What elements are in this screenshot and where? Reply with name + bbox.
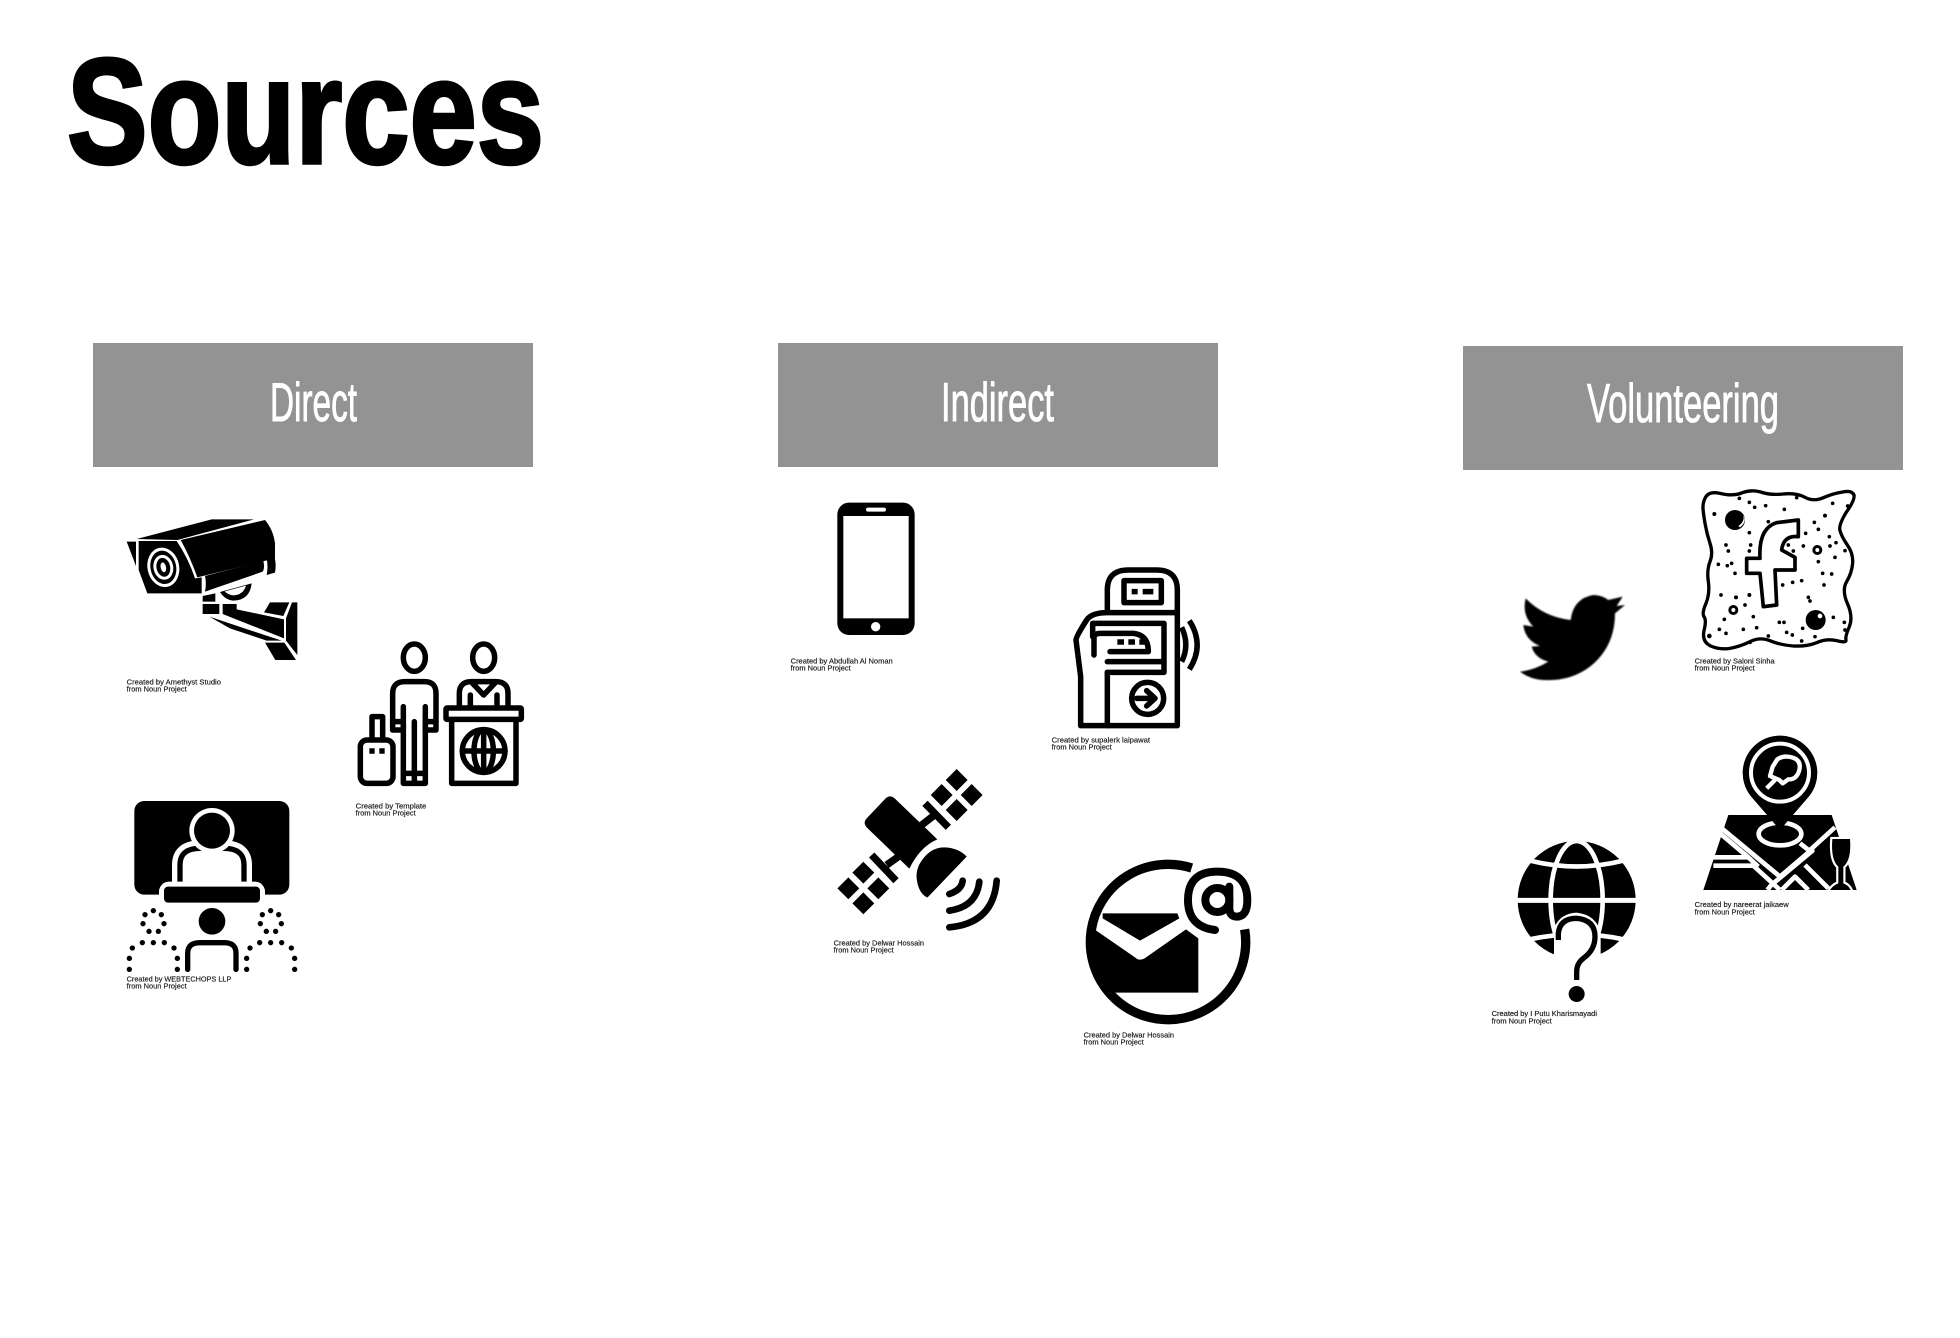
credit: Template: Created by Template xyxy=(356,803,426,810)
credit: supalerk laipawat: Created by supalerk laipawat xyxy=(1052,737,1150,744)
icon: traveller at passport desk xyxy=(360,644,521,783)
credit: Delwar Hossain (satellite): from Noun Project xyxy=(834,948,894,955)
credit: Template: from Noun Project xyxy=(356,811,416,818)
credit: Abdullah Al Noman xyxy=(791,658,893,673)
icon: satellite xyxy=(838,770,997,927)
icon: security camera xyxy=(127,519,297,660)
credit: Template xyxy=(356,803,426,818)
credit: Abdullah Al Noman: from Noun Project xyxy=(791,666,851,673)
credit: supalerk laipawat: from Noun Project xyxy=(1052,745,1112,752)
panel: volunteering xyxy=(1463,346,1903,1026)
credit: I Putu Kharismayadi: Created by I Putu Kharismayadi xyxy=(1492,1011,1597,1018)
heading: volunteering xyxy=(1463,346,1903,470)
credit: Amethyst Studio: Created by Amethyst Studio xyxy=(127,679,221,686)
credit: supalerk laipawat xyxy=(1052,737,1150,752)
credit: WEBTECHOPS LLP: from Noun Project xyxy=(127,984,187,991)
credit: Delwar Hossain (email) xyxy=(1084,1032,1174,1047)
panel: indirect xyxy=(778,343,1247,1047)
heading: indirect xyxy=(778,343,1218,467)
credit: Delwar Hossain (satellite): Created by Delwar Hossain xyxy=(834,940,924,947)
icon: presenter and audience xyxy=(127,801,297,972)
credit: Saloni Sinha: from Noun Project xyxy=(1695,666,1755,673)
heading: direct xyxy=(93,343,533,467)
credit: WEBTECHOPS LLP: Created by WEBTECHOPS LLP xyxy=(127,976,232,983)
icon: twitter bird xyxy=(1520,595,1625,680)
icon: globe with question mark xyxy=(1513,841,1640,1002)
credit: Abdullah Al Noman: Created by Abdullah Al Noman xyxy=(791,658,893,665)
icon: map pin with wine xyxy=(1703,736,1857,890)
credit: I Putu Kharismayadi xyxy=(1492,1011,1597,1026)
icon: doodle facebook logo xyxy=(1703,491,1854,649)
panel: direct xyxy=(93,343,533,991)
credit: Delwar Hossain (email): from Noun Project xyxy=(1084,1040,1144,1047)
credit: nareerat jaikaew xyxy=(1695,902,1790,917)
heading: direct: Direct xyxy=(270,371,357,433)
credit: nareerat jaikaew: from Noun Project xyxy=(1695,910,1755,917)
heading: indirect: Indirect xyxy=(941,371,1054,433)
credit: Saloni Sinha: Created by Saloni Sinha xyxy=(1695,658,1775,665)
title: Sources xyxy=(67,27,544,195)
credit: Saloni Sinha xyxy=(1695,658,1775,673)
credit: nareerat jaikaew: Created by nareerat jaikaew xyxy=(1695,902,1790,909)
credit: Delwar Hossain (email): Created by Delwar Hossain xyxy=(1084,1032,1174,1039)
credit: WEBTECHOPS LLP xyxy=(127,976,232,991)
icon: card terminal xyxy=(1076,570,1197,726)
credit: Amethyst Studio: from Noun Project xyxy=(127,687,187,694)
credit: Delwar Hossain (satellite) xyxy=(834,940,924,955)
icon: email envelope with at sign xyxy=(1090,864,1247,1020)
icon: smartphone xyxy=(837,503,915,635)
credit: I Putu Kharismayadi: from Noun Project xyxy=(1492,1019,1552,1026)
heading: volunteering: Volunteering xyxy=(1587,372,1779,434)
credit: Amethyst Studio xyxy=(127,679,221,694)
